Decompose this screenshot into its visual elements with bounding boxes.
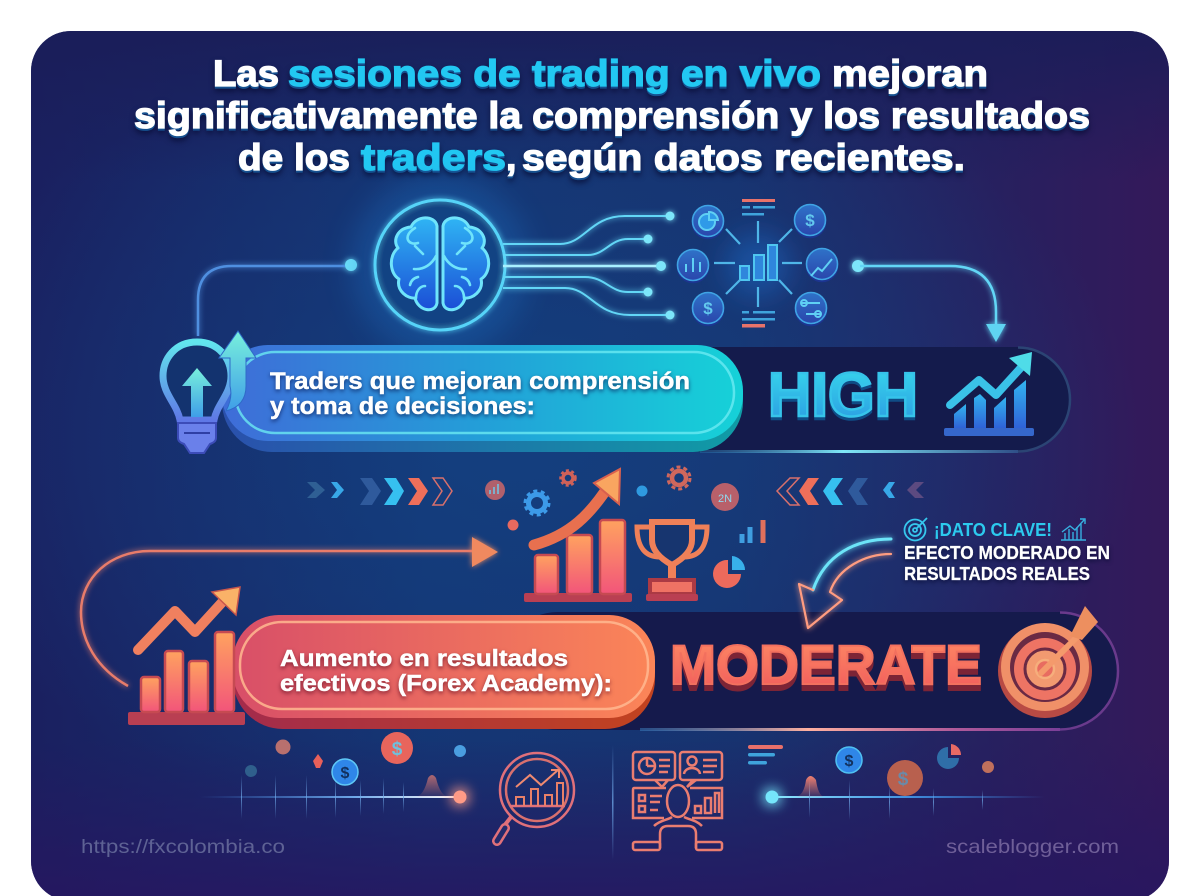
title: sesiones de trading en vivo xyxy=(288,52,821,94)
floating coins right xyxy=(748,744,994,796)
floating icons xyxy=(485,467,763,588)
callout: key fact: ¡DATO CLAVE! xyxy=(934,519,1052,540)
title: traders xyxy=(361,136,506,178)
icon: brain in circle xyxy=(350,175,530,355)
icon: target with arrow xyxy=(998,606,1098,718)
hub bars xyxy=(740,245,777,280)
icon: trophy xyxy=(637,522,707,601)
title: de los xyxy=(238,136,350,178)
bottom left pulse line xyxy=(200,775,466,819)
red pill xyxy=(233,615,655,729)
hub spokes xyxy=(714,221,802,307)
title xyxy=(134,52,1090,178)
icon: growth chart xyxy=(524,469,632,602)
value: moderate: MODERATE xyxy=(670,633,982,696)
floating coins right: $ xyxy=(845,753,854,770)
arrow: loop to growth chart xyxy=(81,537,498,686)
floating coins right: $ xyxy=(898,769,909,790)
connector: bulb to brain xyxy=(198,259,357,336)
source: fxcolombia: https://fxcolombia.co xyxy=(81,836,285,858)
cyan pill xyxy=(222,345,743,452)
pill text xyxy=(270,368,690,420)
title: , xyxy=(506,136,516,178)
icon: target small xyxy=(904,518,927,540)
callout: key fact: RESULTADOS REALES xyxy=(904,563,1090,584)
pill text: Aumento en resultados xyxy=(280,645,568,671)
icon: data hub: $ xyxy=(703,299,713,318)
arrow: hub to high score xyxy=(852,260,1006,342)
title: según datos recientes. xyxy=(522,136,965,178)
pill text: y toma de decisiones: xyxy=(270,393,535,420)
floating coins left xyxy=(245,732,466,785)
title: Las xyxy=(213,52,279,94)
icon: magnifier chart xyxy=(497,753,574,841)
floating coins left: $ xyxy=(341,765,350,782)
callout: key fact xyxy=(904,518,1110,584)
icon: data hub: $ xyxy=(805,211,815,230)
floating icons: 2N xyxy=(718,493,732,505)
pill text: efectivos (Forex Academy): xyxy=(280,670,612,696)
node coins xyxy=(678,204,838,324)
floating coins left: $ xyxy=(392,739,403,760)
icon: rising chart xyxy=(944,352,1034,436)
dark track xyxy=(500,612,1118,731)
pill text xyxy=(280,645,612,696)
source: scaleblogger: scaleblogger.com xyxy=(946,836,1119,858)
pill text: Traders que mejoran comprensión xyxy=(270,368,690,395)
title: significativamente la comprensión y los resultados xyxy=(134,94,1090,136)
dark track xyxy=(640,347,1070,453)
icon: growth chart left xyxy=(128,587,245,725)
value: high: HIGH xyxy=(768,361,918,430)
icon: mini chart xyxy=(1061,519,1086,540)
icon: light bulb with arrows xyxy=(163,331,256,453)
chevrons right xyxy=(777,478,924,505)
connector lines: brain to data hub xyxy=(503,212,674,320)
hub text lines xyxy=(742,199,775,328)
panel: moderate metric xyxy=(233,606,1118,731)
title: mejoran xyxy=(832,52,988,94)
panel: high metric xyxy=(222,345,1070,453)
icon: data hub xyxy=(678,199,838,328)
callout: key fact: EFECTO MODERADO EN xyxy=(904,542,1110,563)
bottom right pulse line xyxy=(612,745,1045,860)
icon: analyst at screens xyxy=(633,752,722,850)
arrow: callout to moderate xyxy=(799,539,891,628)
chevrons left xyxy=(307,478,452,505)
